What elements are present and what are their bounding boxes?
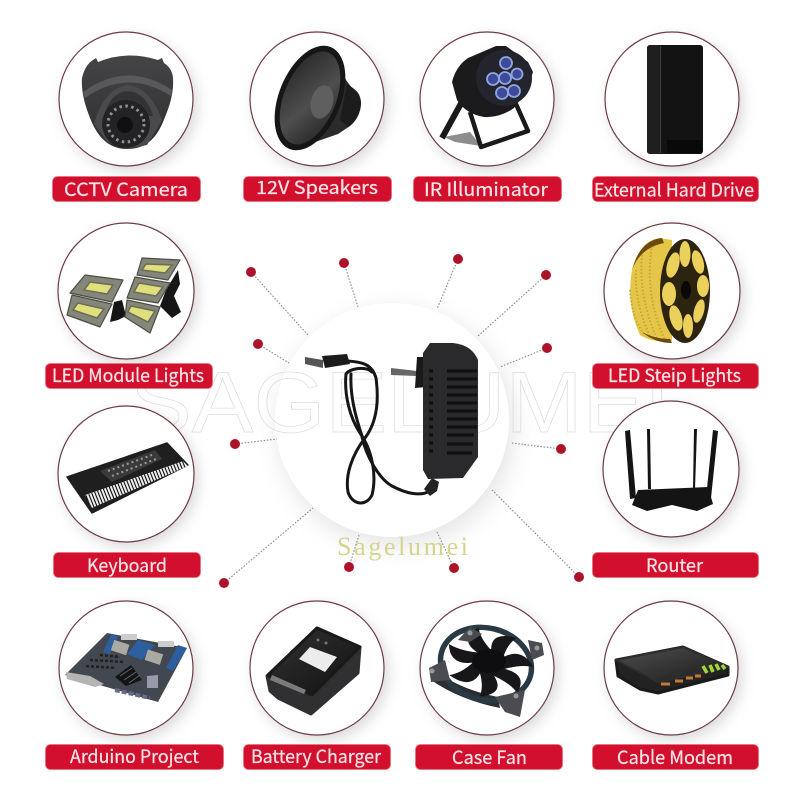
label: Cable Modem: [617, 744, 733, 770]
panel: IR Illuminator: [414, 32, 562, 202]
central adapter disc: [275, 303, 514, 546]
label: IR Illuminator: [424, 176, 549, 202]
label: 12V Speakers: [256, 174, 378, 200]
icon: flood lights: [67, 258, 181, 333]
label: LED Module Lights: [52, 362, 204, 388]
label: Case Fan: [452, 744, 527, 770]
panel: CCTV Camera: [52, 32, 200, 202]
icon: hard drive: [647, 45, 703, 154]
icon: power adapter: [305, 343, 478, 503]
panel: LED Strip Lights: [592, 223, 758, 388]
label: [416, 744, 562, 770]
panel: 12V Speakers: [244, 32, 392, 202]
icon: circuit board: [65, 633, 187, 702]
panel: Keyboard: [54, 406, 200, 578]
icon: LED strip reel: [630, 238, 710, 343]
label: LED Steip Lights: [608, 362, 741, 388]
label: Battery Charger: [251, 743, 382, 769]
icon: battery charger: [267, 628, 360, 714]
label: External Hard Drive: [594, 176, 754, 202]
label: [54, 552, 200, 578]
panel: Router: [592, 401, 758, 578]
label: CCTV Camera: [64, 176, 188, 202]
icon: keyboard: [67, 443, 188, 513]
panel: External Hard Drive: [592, 32, 758, 202]
dotted connectors with red dots: [219, 254, 584, 588]
icon: par light: [442, 46, 533, 147]
panel: LED Module Lights: [46, 223, 212, 388]
icon: case fan: [429, 616, 544, 717]
label: Keyboard: [87, 552, 167, 578]
panel: Battery Charger: [244, 601, 390, 770]
label: Arduino Project: [70, 743, 199, 769]
icon: dome camera: [82, 55, 173, 149]
icon: speaker: [261, 35, 361, 161]
watermark: Sagelumei: Sagelumei: [337, 532, 468, 561]
panel: Arduino Project: [46, 601, 224, 770]
panel: Case Fan: [416, 601, 562, 770]
label: Router: [646, 552, 704, 578]
label: [592, 552, 758, 578]
panel: Cable Modem: [592, 601, 758, 770]
watermark: outlined brand text: SAGELUMEI: [130, 355, 670, 451]
icon: router: [625, 429, 718, 511]
icon: cable modem: [616, 647, 728, 693]
